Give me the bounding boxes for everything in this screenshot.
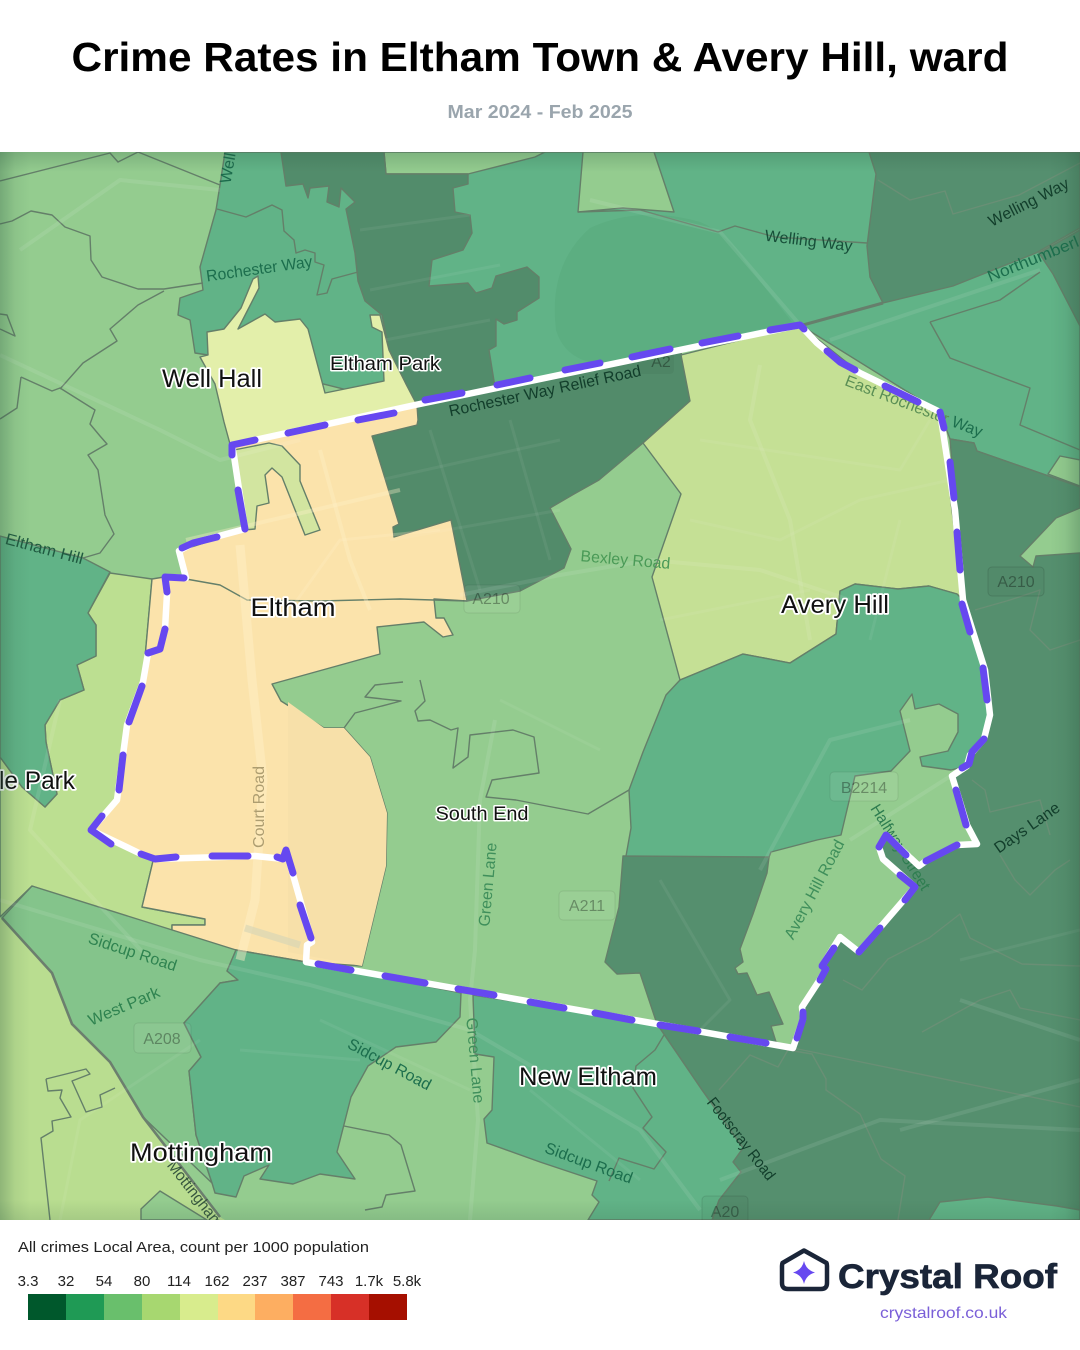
region: West Park green xyxy=(2,886,238,1183)
place labels xyxy=(0,353,889,1167)
road labels: Northumberl xyxy=(985,234,1080,286)
region: inner parcel borders xyxy=(0,152,1080,1220)
road labels: West Park xyxy=(86,984,163,1030)
legend xyxy=(18,1239,422,1320)
region: dark cluster north of Rochester Way xyxy=(281,152,539,407)
icon: house with star xyxy=(782,1250,827,1289)
region: green pocket inside Eltham xyxy=(234,443,320,535)
road number shields: A20 xyxy=(711,1204,739,1221)
road labels: Green Lane xyxy=(476,842,501,927)
legend: 5.8k xyxy=(393,1273,422,1290)
road labels: Days Lane xyxy=(991,800,1063,857)
region: mid green south of Avery Hill xyxy=(626,584,990,857)
place labels: Avery Hill xyxy=(781,591,889,619)
road labels xyxy=(3,152,1080,1231)
road number shields: A210 xyxy=(472,591,510,608)
logo: Crystal Roof: Crystal Roof xyxy=(838,1258,1058,1296)
region: faint inner borders in dark areas xyxy=(719,163,1080,1220)
road labels: Avery Hill Road xyxy=(782,837,848,942)
region: dark central wedge xyxy=(372,352,690,601)
subtitle: date range: Mar 2024 - Feb 2025 xyxy=(448,102,632,122)
region: yellow-green west of Eltham xyxy=(0,573,205,937)
road labels: East Rochester Way xyxy=(842,373,985,441)
region: Eltham peach xyxy=(90,405,467,966)
legend: 387 xyxy=(280,1273,306,1290)
place labels: Eltham Park xyxy=(330,353,440,375)
logo: Crystal Roof xyxy=(782,1250,1058,1322)
legend: 3.3 xyxy=(18,1273,38,1290)
place labels: le Park xyxy=(0,767,75,795)
place labels: Well Hall xyxy=(162,365,262,393)
road number shields: B2214 xyxy=(841,780,887,797)
place labels: New Eltham xyxy=(519,1063,657,1091)
legend: 162 xyxy=(204,1273,230,1290)
place labels: Mottingham xyxy=(130,1139,272,1167)
region: northern mid-green band xyxy=(178,152,1080,487)
region: south-west yellow-green xyxy=(0,917,225,1220)
choropleth map xyxy=(0,152,1080,1231)
legend: 54 xyxy=(96,1273,112,1290)
road labels: Sidcup Road xyxy=(86,930,179,975)
region: New Eltham mid green xyxy=(473,995,743,1220)
region: light green parcels at top xyxy=(384,152,1080,486)
roads xyxy=(0,180,1080,1220)
place labels: Eltham xyxy=(250,594,336,622)
road labels: Welling Way xyxy=(764,228,853,255)
legend: 32 xyxy=(58,1273,74,1290)
logo: Crystal Roof: crystalroof.co.uk xyxy=(880,1305,1008,1322)
road labels: Sidcup Road xyxy=(345,1036,434,1094)
road number shields: A2 xyxy=(651,354,671,371)
road labels: Sidcup Road xyxy=(542,1140,635,1187)
title: Crime Rates in Eltham Town & Avery Hill, ward xyxy=(72,34,1008,80)
road number shields xyxy=(134,350,1044,1226)
region: mid green at left edge xyxy=(0,536,110,807)
road number shields: A210 xyxy=(997,574,1035,591)
region: Avery Hill yellow-green xyxy=(643,325,963,680)
road labels: Welling Way xyxy=(986,175,1072,231)
road number shields: A208 xyxy=(143,1031,181,1048)
road number shields: A211 xyxy=(569,898,605,915)
region: mid green around Sidcup Road xyxy=(184,950,461,1197)
legend: 114 xyxy=(167,1273,191,1290)
region: dark north-east xyxy=(867,152,1080,303)
road labels: Rochester Way xyxy=(205,254,314,285)
road labels: Rochester Way Relief Road xyxy=(447,363,643,420)
road labels: Green Lane xyxy=(462,1017,487,1104)
place labels: South End xyxy=(436,803,528,825)
ward boundary: white line with purple dashes xyxy=(91,325,990,1048)
road labels: Mottingham xyxy=(163,1157,226,1231)
road labels: Footscray Road xyxy=(703,1095,778,1184)
legend: 743 xyxy=(318,1273,344,1290)
road labels: Well xyxy=(218,152,240,185)
legend: All crimes Local Area, count per 1000 population xyxy=(18,1239,369,1256)
road labels: Bexley Road xyxy=(580,548,671,573)
road labels: Court Road xyxy=(251,766,268,848)
legend: 237 xyxy=(242,1273,268,1290)
region: dark south-east xyxy=(605,439,1080,1220)
road labels: Eltham Hill xyxy=(3,531,85,568)
legend: 80 xyxy=(134,1273,150,1290)
legend: 1.7k xyxy=(355,1273,384,1290)
region: Well Hall pale yellow xyxy=(200,276,417,444)
road labels: Halfway Street xyxy=(867,802,933,894)
